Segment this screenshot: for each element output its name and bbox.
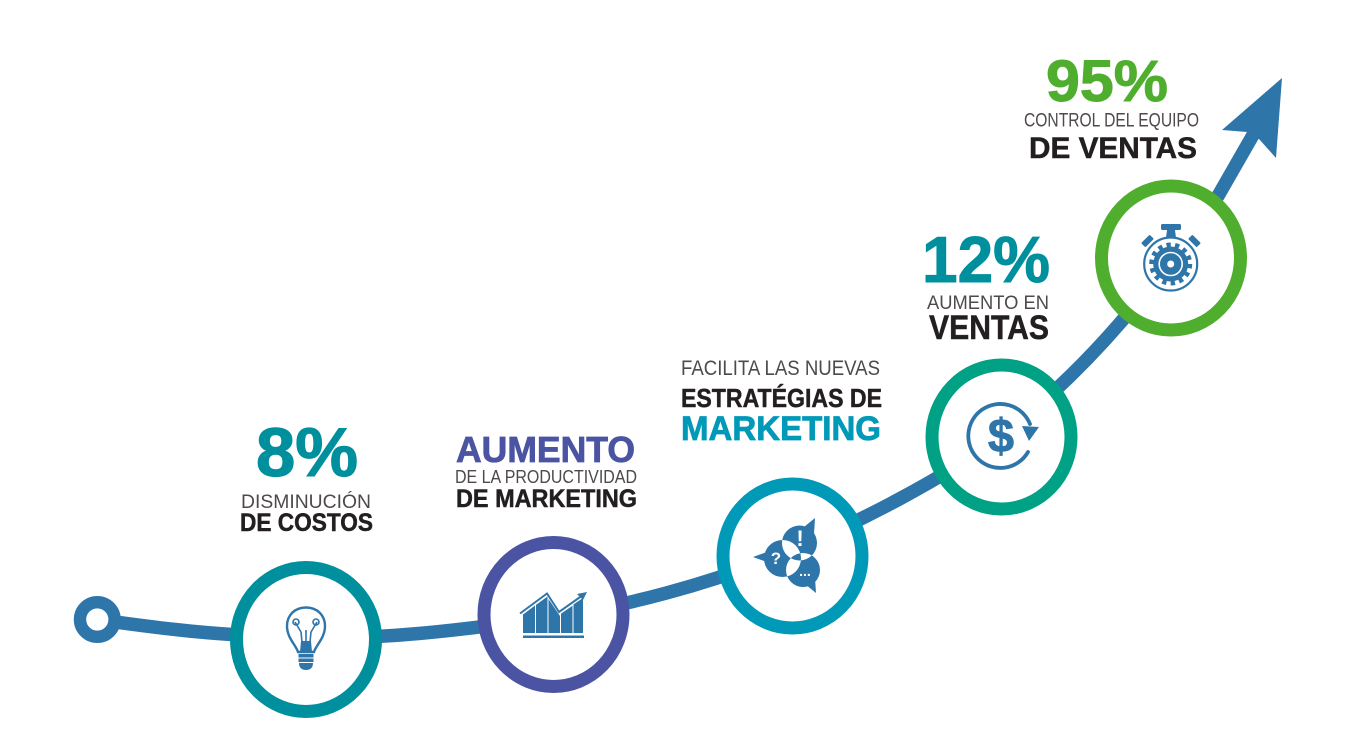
- step 1: disminucion de costos: [236, 414, 376, 712]
- label: de costos: DE COSTOS: [240, 509, 373, 537]
- label: ventas: VENTAS: [929, 309, 1049, 347]
- step 4: aumento en ventas: [922, 223, 1071, 509]
- icon: dollar cycle: $: [988, 409, 1014, 462]
- icon: three speech bubbles: ?: [771, 549, 781, 568]
- label: aumento en: AUMENTO EN: [927, 293, 1049, 314]
- icon: three speech bubbles: !: [796, 526, 804, 551]
- label: estrategias de: ESTRATÉGIAS DE: [681, 383, 882, 413]
- label: de la productividad: DE LA PRODUCTIVIDAD: [455, 467, 637, 487]
- ring: indigo: [484, 542, 623, 686]
- stat: 95%: 95%: [1046, 49, 1168, 114]
- icon: dollar cycle: [968, 404, 1039, 468]
- label: de marketing: DE MARKETING: [456, 485, 637, 513]
- step 5: control de ventas: [1024, 49, 1240, 330]
- icon: light bulb: [287, 608, 325, 670]
- icon: three speech bubbles: [753, 518, 820, 593]
- ring: cyan: [723, 484, 862, 628]
- heading: marketing: MARKETING: [681, 410, 881, 448]
- icon: three speech bubbles: ...: [799, 563, 811, 579]
- stat: 8%: 8%: [256, 414, 358, 491]
- ring: teal: [236, 568, 376, 712]
- label: control del equipo: CONTROL DEL EQUIPO: [1024, 110, 1199, 132]
- heading: aumento: AUMENTO: [456, 429, 635, 470]
- label: de ventas: DE VENTAS: [1029, 132, 1197, 165]
- step 3: estrategias: [681, 357, 882, 628]
- stat: 12%: 12%: [922, 223, 1050, 296]
- start ring: [80, 602, 115, 637]
- icon: bar chart with trend arrow: [520, 592, 587, 638]
- growth arrow line: [97, 78, 1282, 638]
- step 2: productividad: [455, 429, 637, 686]
- ring: green: [932, 365, 1071, 509]
- ring: lime: [1102, 186, 1240, 330]
- label: disminucion: DISMINUCIÓN: [241, 491, 371, 513]
- label: facilita las nuevas: FACILITA LAS NUEVAS: [681, 357, 880, 380]
- icon: stopwatch with gear: [1141, 224, 1201, 290]
